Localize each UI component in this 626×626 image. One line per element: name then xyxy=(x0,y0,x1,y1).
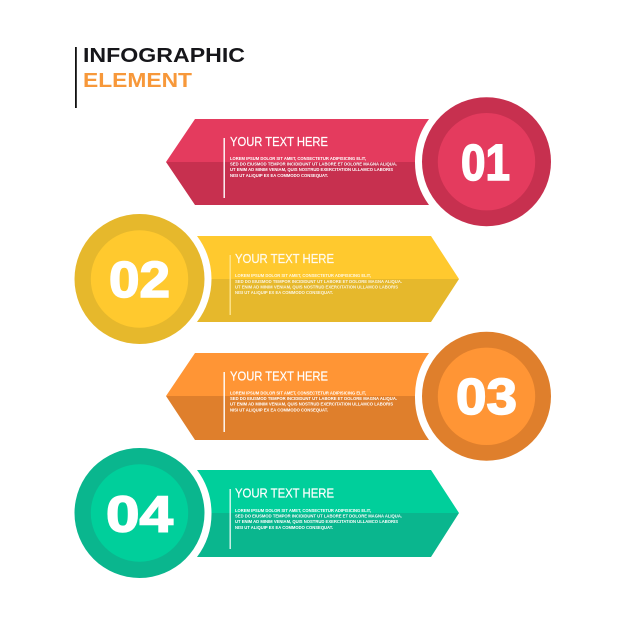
arrow banner 03 xyxy=(166,353,429,440)
text block 01: YOUR TEXT HERE xyxy=(230,134,328,149)
text block 02: NISI UT ALIQUIP EX EA COMMODO CONSEQUAT. xyxy=(235,290,333,295)
number badge 02 xyxy=(74,214,204,344)
number badge 01: 01 xyxy=(461,134,510,191)
text block 01: UT ENIM AD MINIM VENIAM, QUIS NOSTRUD EXERCITATION ULLAMCO LABORIS xyxy=(230,167,393,172)
arrow banner 01 xyxy=(166,119,429,205)
text block 03: UT ENIM AD MINIM VENIAM, QUIS NOSTRUD EXERCITATION ULLAMCO LABORIS xyxy=(230,402,393,407)
text block 03 xyxy=(224,368,397,432)
arrow banner 02 xyxy=(197,236,459,322)
text block 04 xyxy=(230,486,402,549)
title: ELEMENT xyxy=(83,70,192,92)
text block 03: SED DO EIUSMOD TEMPOR INCIDIDUNT UT LABORE ET DOLORE MAGNA ALIQUA. xyxy=(230,396,397,401)
number badge 04: 04 xyxy=(106,486,174,542)
number badge 01 xyxy=(422,97,551,226)
number badge 04 xyxy=(74,448,204,578)
text block 04: UT ENIM AD MINIM VENIAM, QUIS NOSTRUD EXERCITATION ULLAMCO LABORIS xyxy=(235,519,398,524)
text block 04: YOUR TEXT HERE xyxy=(235,486,334,500)
text block 01: SED DO EIUSMOD TEMPOR INCIDIDUNT UT LABORE ET DOLORE MAGNA ALIQUA. xyxy=(230,162,397,167)
text block 02 xyxy=(230,251,402,315)
arrow banner 04 xyxy=(197,470,459,557)
number badge 03 xyxy=(422,332,551,461)
title: INFOGRAPHIC xyxy=(83,45,245,67)
panel: step 03 xyxy=(166,332,551,461)
text block 02: SED DO EIUSMOD TEMPOR INCIDIDUNT UT LABORE ET DOLORE MAGNA ALIQUA. xyxy=(235,279,402,284)
panel: step 04 xyxy=(74,448,459,578)
text block 03: YOUR TEXT HERE xyxy=(230,368,328,384)
text block 03: LOREM IPSUM DOLOR SIT AMET, CONSECTETUR ADIPISICING ELIT, xyxy=(230,390,366,396)
panel: step 01 xyxy=(166,97,551,226)
title xyxy=(75,45,245,108)
text block 01 xyxy=(224,134,397,198)
text block 02: LOREM IPSUM DOLOR SIT AMET, CONSECTETUR ADIPISICING ELIT, xyxy=(235,273,371,278)
text block 02: YOUR TEXT HERE xyxy=(235,251,334,266)
text block 01: LOREM IPSUM DOLOR SIT AMET, CONSECTETUR ADIPISICING ELIT, xyxy=(230,156,366,161)
text block 04: NISI UT ALIQUIP EX EA COMMODO CONSEQUAT. xyxy=(235,525,333,530)
number badge 03: 03 xyxy=(456,368,517,425)
number badge 02: 02 xyxy=(109,251,170,308)
panel: step 02 xyxy=(74,214,459,344)
text block 03: NISI UT ALIQUIP EX EA COMMODO CONSEQUAT. xyxy=(230,407,328,412)
text block 02: UT ENIM AD MINIM VENIAM, QUIS NOSTRUD EXERCITATION ULLAMCO LABORIS xyxy=(235,284,398,289)
text block 01: NISI UT ALIQUIP EX EA COMMODO CONSEQUAT. xyxy=(230,173,328,178)
text block 04: SED DO EIUSMOD TEMPOR INCIDIDUNT UT LABORE ET DOLORE MAGNA ALIQUA. xyxy=(235,514,402,519)
text block 04: LOREM IPSUM DOLOR SIT AMET, CONSECTETUR ADIPISICING ELIT, xyxy=(235,508,371,513)
